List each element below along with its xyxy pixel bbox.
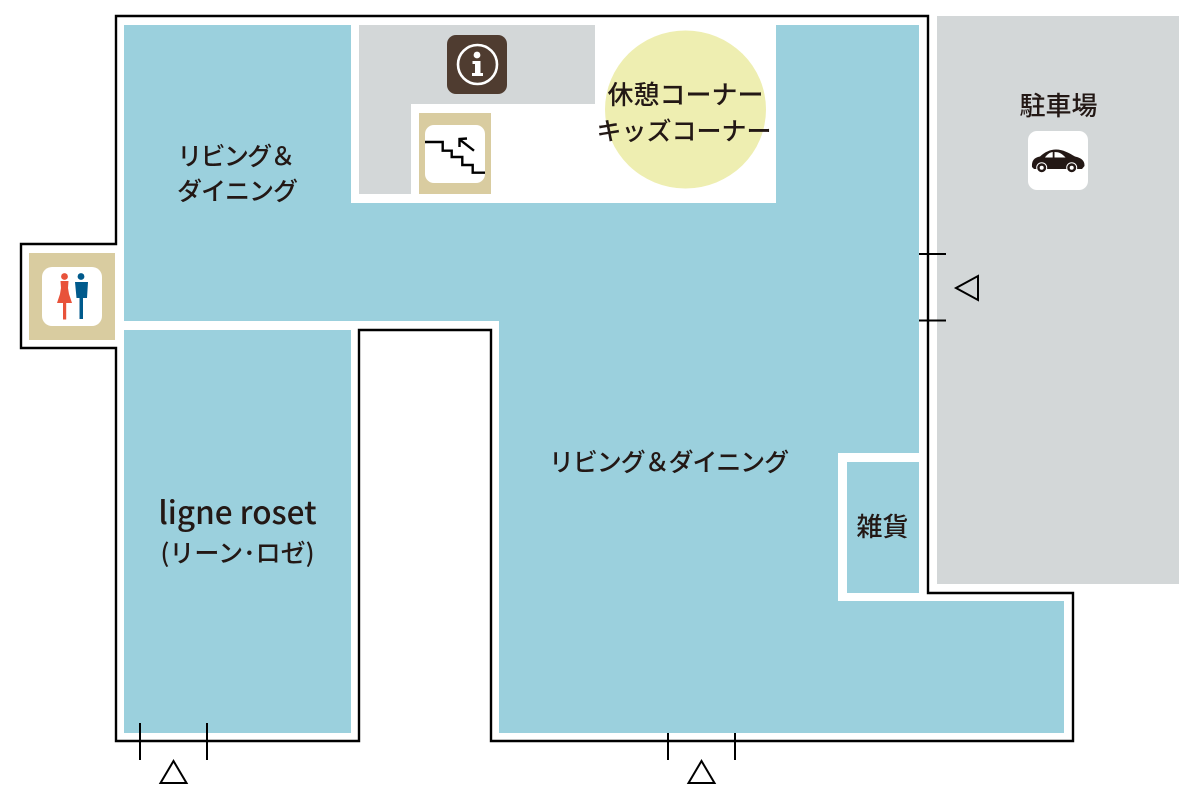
heading: ligne roset (158, 488, 317, 570)
heading: living and dining upper left (177, 137, 298, 208)
heading: rest corner and kids corner: 休憩コーナー (607, 75, 764, 112)
heading: living and dining main: リビング＆ダイニング (549, 443, 789, 479)
icon: man figure (75, 273, 88, 319)
panel: building outline (21, 16, 1073, 741)
arrow: lower left entrance (140, 723, 207, 783)
icon: car (1028, 131, 1088, 190)
heading: parking: 駐車場 (1019, 86, 1098, 123)
panel: ligne roset area (124, 330, 351, 733)
heading: ligne roset: ligne roset (158, 488, 317, 534)
heading: living and dining upper left: リビング＆ (177, 137, 294, 173)
icon: stairs (419, 113, 491, 194)
panel: rest and kids corner circle (605, 30, 766, 188)
icon: woman figure (57, 273, 72, 320)
heading: living and dining upper left: ダイニング (177, 172, 298, 208)
heading: rest corner and kids corner: キッズコーナー (596, 112, 772, 148)
panel: parking area (937, 16, 1179, 584)
panel: goods area (847, 462, 919, 593)
panel: service area (359, 25, 595, 194)
panel: main living and dining area (124, 25, 1064, 733)
arrow: lower centre entrance (668, 733, 735, 783)
heading: rest corner and kids corner (596, 75, 772, 148)
heading: ligne roset: (リーン･ロゼ) (160, 534, 315, 570)
icon: restrooms (29, 253, 115, 340)
icon: information (447, 35, 507, 94)
arrow: right entrance (919, 254, 978, 320)
heading: goods: 雑貨 (856, 507, 909, 544)
